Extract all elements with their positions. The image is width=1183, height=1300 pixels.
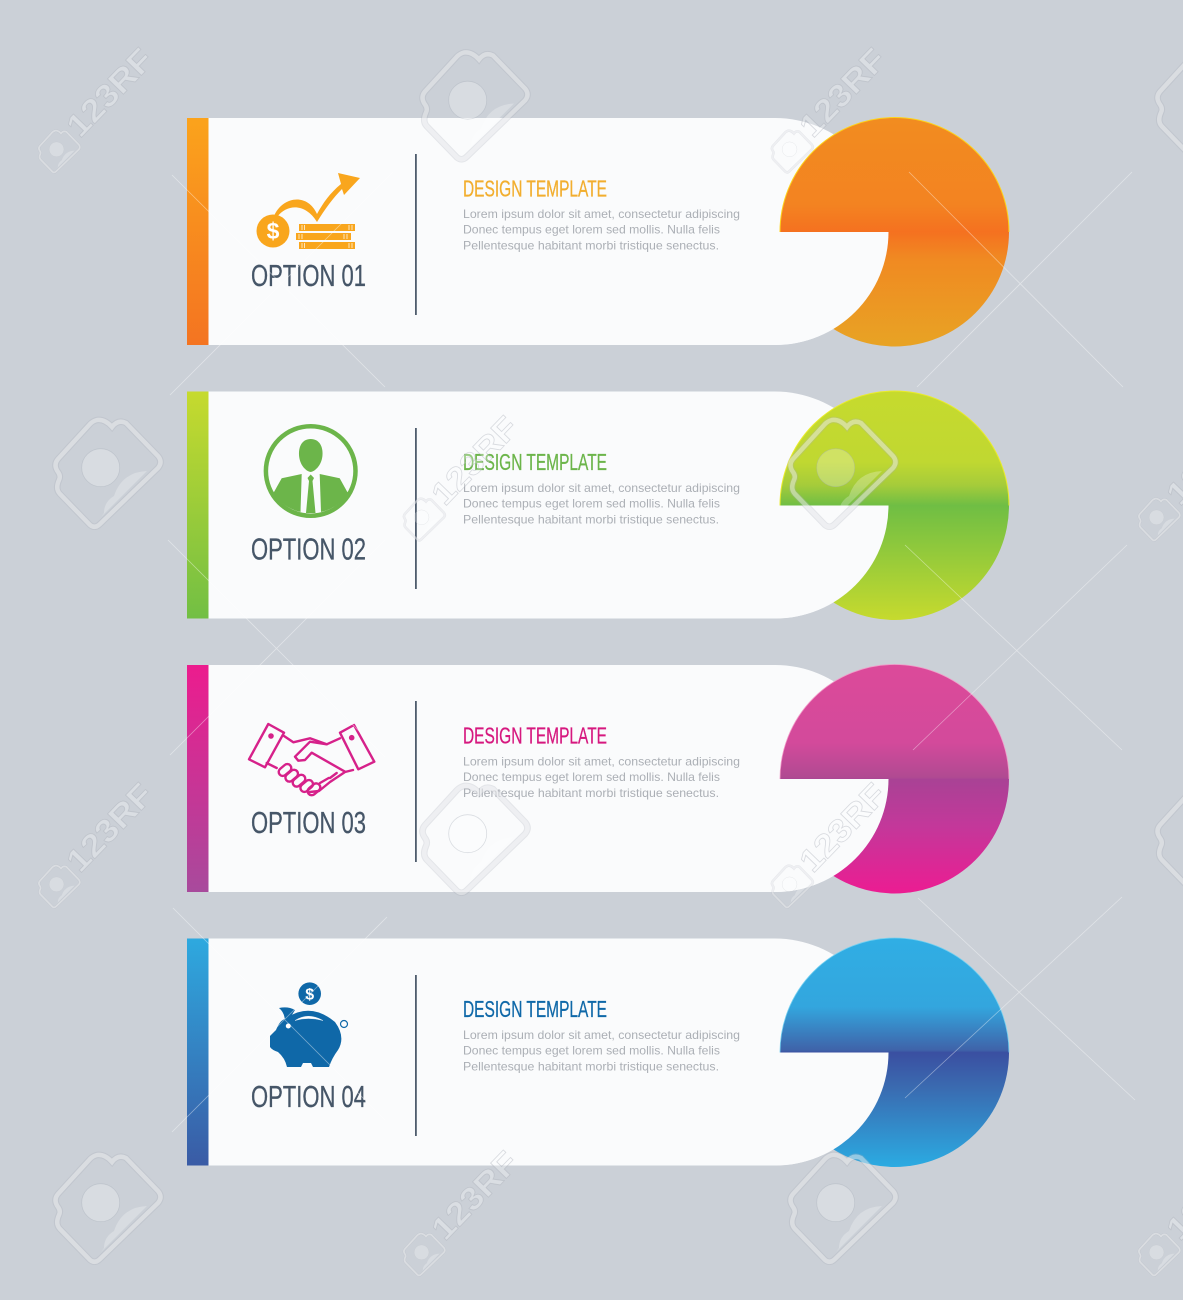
- divider 01: [415, 154, 417, 315]
- disc 01: [780, 118, 1009, 346]
- text block 01: Lorem ipsum dolor sit amet, consectetur adipiscing: [463, 207, 740, 221]
- text block 03: [463, 754, 740, 800]
- label: option 03: OPTION 03: [251, 805, 366, 840]
- text block 04: [463, 1028, 740, 1074]
- card body 04: [208, 938, 888, 1166]
- watermark overlay: 123RF: [792, 776, 893, 879]
- card body 01: [208, 118, 888, 345]
- watermark overlay: 123RF: [424, 1144, 525, 1247]
- card lower overlap 02: [500, 506, 888, 618]
- card lower overlap 03: [500, 779, 888, 892]
- colour bar 04: [187, 938, 208, 1166]
- text block 04: Lorem ipsum dolor sit amet, consectetur adipiscing: [463, 1028, 740, 1042]
- label: option 01: OPTION 01: [251, 258, 366, 293]
- icon: businessman: [266, 426, 356, 516]
- icon: piggy bank: $: [305, 986, 314, 1004]
- text block 03: Donec tempus eget lorem sed mollis. Nulla felis: [463, 770, 720, 784]
- colour bar 02: [187, 392, 208, 618]
- text block 01: [463, 207, 740, 252]
- panel: option 04: [187, 938, 1009, 1167]
- disc 03: [780, 664, 1009, 894]
- text block 02: Pellentesque habitant morbi tristique senectus.: [463, 512, 719, 526]
- watermark overlay: 123RF: [424, 409, 525, 512]
- text block 02: Lorem ipsum dolor sit amet, consectetur adipiscing: [463, 481, 740, 495]
- label: option 04: OPTION 04: [251, 1079, 366, 1114]
- icon: coin and arrow: $: [267, 218, 280, 244]
- text block 01: Donec tempus eget lorem sed mollis. Nulla felis: [463, 222, 720, 236]
- disc 02: [780, 391, 1009, 620]
- card lower overlap 01: [500, 232, 888, 345]
- disc 04: [780, 938, 1009, 1167]
- icon: piggy bank: [270, 982, 348, 1067]
- colour bar 01: [187, 118, 208, 345]
- text block 02: Donec tempus eget lorem sed mollis. Nulla felis: [463, 496, 720, 510]
- watermark overlay: 123RF: [59, 776, 160, 879]
- disc rim 02: [780, 391, 1009, 506]
- heading 03: DESIGN TEMPLATE: [463, 722, 607, 748]
- heading 04: DESIGN TEMPLATE: [463, 996, 607, 1022]
- text block 04: Donec tempus eget lorem sed mollis. Nulla felis: [463, 1044, 720, 1058]
- watermark overlay: 123RF: [59, 41, 160, 144]
- card body 02: [208, 392, 888, 618]
- text block 03: Pellentesque habitant morbi tristique senectus.: [463, 786, 719, 800]
- icon: handshake: [249, 724, 374, 797]
- text block 03: Lorem ipsum dolor sit amet, consectetur adipiscing: [463, 754, 740, 768]
- disc rim 01: [780, 118, 1009, 232]
- divider 02: [415, 428, 417, 589]
- text block 02: [463, 481, 740, 526]
- divider 03: [415, 701, 417, 862]
- text block 04: Pellentesque habitant morbi tristique senectus.: [463, 1060, 719, 1074]
- text block 01: Pellentesque habitant morbi tristique senectus.: [463, 238, 719, 252]
- heading 01: DESIGN TEMPLATE: [463, 176, 607, 202]
- colour bar 03: [187, 665, 208, 892]
- disc rim 04: [780, 938, 1009, 1052]
- card lower overlap 04: [500, 1052, 888, 1166]
- heading 02: DESIGN TEMPLATE: [463, 449, 607, 475]
- card body 03: [208, 665, 888, 892]
- watermark overlay: 123RF: [792, 41, 893, 144]
- panel: option 03: [187, 664, 1009, 894]
- panel: option 01: [187, 118, 1009, 346]
- disc rim 03: [780, 664, 1009, 779]
- label: option 02: OPTION 02: [251, 532, 366, 566]
- divider 04: [415, 975, 417, 1136]
- panel: option 02: [187, 391, 1009, 620]
- icon: coin and arrow: [256, 173, 360, 249]
